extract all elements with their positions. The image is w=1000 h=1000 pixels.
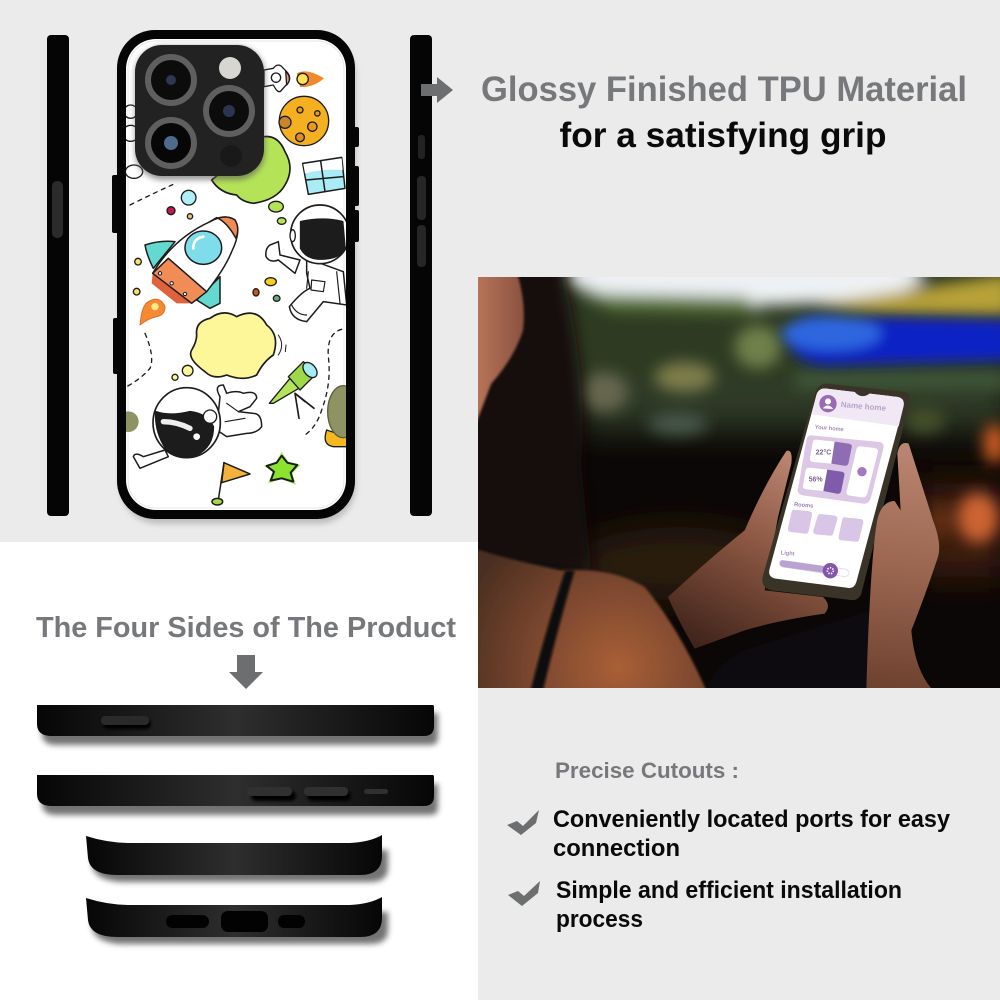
doodle: green cloud (212, 137, 290, 224)
arrow pointing down (229, 655, 263, 689)
lens right (206, 88, 252, 134)
dark lower area (708, 610, 871, 690)
strip body (86, 897, 382, 937)
side strip 4 (86, 897, 388, 944)
app climate card: 56% (809, 476, 823, 483)
right side view of the case (410, 35, 432, 516)
shadow (42, 784, 438, 815)
doodle: yellow cloud (172, 313, 286, 380)
phone case back view (112, 30, 359, 524)
lens bottom left (148, 120, 194, 166)
feature text: Simple and efficient installation (556, 877, 902, 904)
strip body (37, 775, 434, 806)
doodle: comet (297, 71, 324, 87)
doodle: green star (263, 452, 301, 485)
cutouts (166, 911, 305, 932)
button (101, 716, 151, 729)
app climate card: 22°C (816, 448, 831, 456)
doodle: orange planet (279, 96, 329, 146)
case shadow (120, 38, 356, 524)
side strip 2 (37, 775, 438, 815)
headline (481, 70, 967, 155)
dashed path lines (127, 184, 342, 435)
section heading: four sides: The Four Sides of The Product (36, 612, 456, 644)
doodle: saturn (324, 385, 346, 448)
side buttons (112, 127, 359, 374)
doodle: small rocket top (264, 65, 290, 92)
lens top left (148, 57, 194, 103)
camera island (135, 45, 265, 180)
doodle: flag (212, 463, 250, 505)
app section label: Your home (814, 425, 844, 433)
side strip 1 (37, 705, 438, 745)
strip body (86, 835, 382, 875)
phone body (762, 384, 910, 600)
buttons (247, 787, 388, 801)
app room tiles (788, 510, 863, 542)
sensor (220, 145, 242, 167)
app profile icon (819, 395, 837, 412)
shoulder (475, 549, 706, 690)
app light slider (780, 560, 849, 578)
precise cutouts heading: Precise Cutouts : (555, 758, 739, 783)
doodle: astronaut right (266, 205, 349, 322)
case printed surface (126, 39, 346, 510)
strip body (37, 705, 434, 736)
app light label: Light (780, 550, 795, 558)
blurred backdrop (475, 249, 1000, 690)
doodle: rocket flame (140, 299, 165, 325)
feature 2: process (556, 906, 643, 933)
dress strap (531, 570, 575, 690)
case frame (117, 30, 355, 519)
doodle: rocket (145, 217, 238, 308)
left side view of the case (47, 35, 69, 516)
side strip 3 (86, 835, 388, 882)
flash (219, 57, 241, 79)
app header (812, 389, 904, 426)
headline: for a satisfying grip (560, 116, 886, 155)
doodle: outlines behind camera (126, 104, 144, 179)
doodle: telescope (269, 360, 320, 418)
arrow pointing to the headline (421, 77, 453, 103)
app header text: Name home (840, 400, 887, 413)
woman's face (475, 274, 524, 427)
shadow (92, 912, 388, 944)
left hand (668, 451, 828, 649)
doodle: small dots (253, 278, 280, 301)
phone screen (769, 389, 904, 588)
doodle: olive planet left (126, 411, 139, 432)
shadow (92, 850, 388, 882)
doodle: astronaut lower (133, 385, 262, 468)
feature text: Conveniently located ports for easy (553, 806, 951, 833)
lifestyle photo: hands holding a phone (465, 249, 1000, 690)
doodle: bubbles (133, 190, 196, 295)
doodle: window box (303, 157, 345, 194)
shadow (42, 713, 438, 745)
feature 1 (507, 806, 951, 862)
check icon (507, 810, 539, 835)
feature 2 (508, 877, 902, 933)
headline: Glossy Finished TPU Material (481, 70, 967, 109)
space doodle artwork (118, 65, 359, 505)
app rooms label: Rooms (794, 502, 813, 510)
woman's hair (478, 277, 592, 568)
feature 1: connection (553, 835, 680, 862)
right hand (866, 443, 939, 690)
app climate card (798, 435, 884, 504)
check icon (508, 881, 540, 906)
